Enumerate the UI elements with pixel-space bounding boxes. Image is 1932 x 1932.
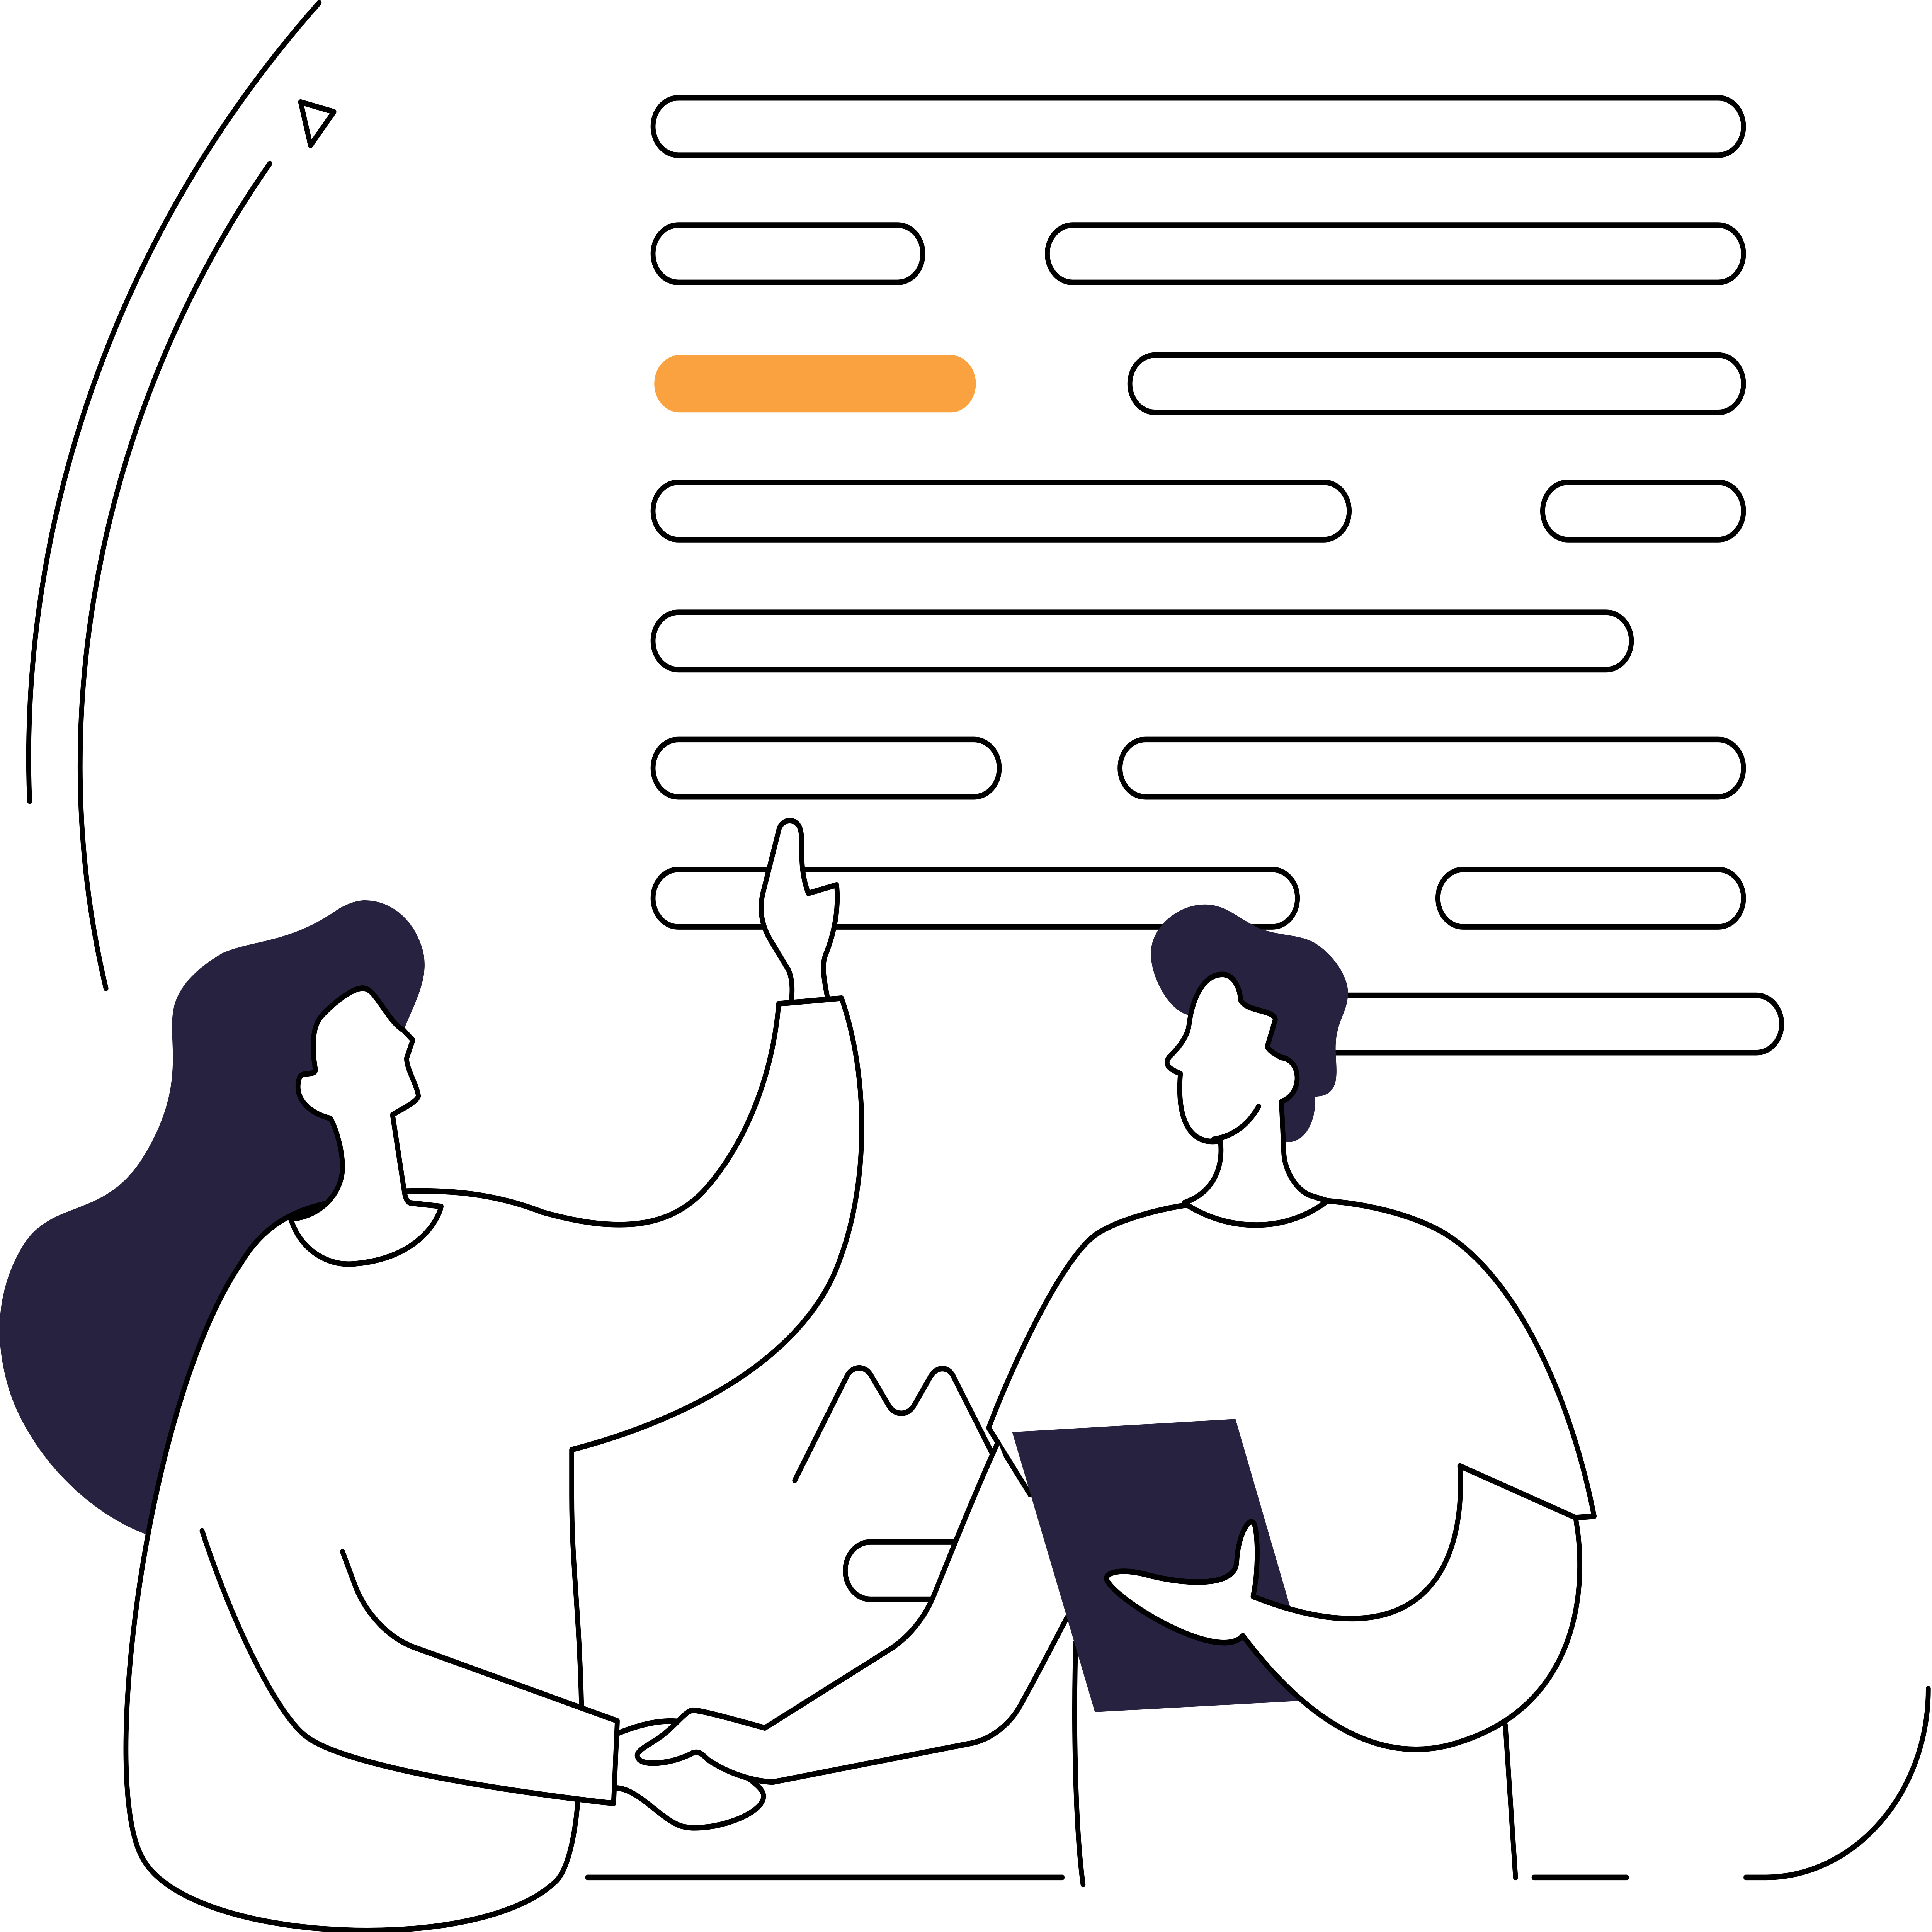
bar row 1	[653, 98, 1743, 155]
icon: triangle	[301, 102, 334, 145]
bar row 5	[653, 612, 1631, 670]
man figure	[637, 905, 1594, 1884]
man arm shaking hands	[637, 1442, 1067, 1782]
man left leg line	[1075, 1643, 1083, 1884]
outer decorative arc	[29, 3, 319, 801]
man right forearm and hand	[1106, 1466, 1580, 1749]
bar row 8	[1245, 995, 1782, 1053]
bar row 4 right	[1543, 482, 1743, 540]
clipboard	[1012, 1419, 1317, 1712]
woman hair	[0, 900, 425, 1535]
woman raised hand	[761, 821, 837, 1004]
inner decorative arc	[80, 163, 270, 988]
man torso	[988, 1199, 1593, 1878]
woman sleeve	[202, 1531, 617, 1803]
ground curve right	[1746, 1689, 1928, 1878]
woman chin shadow	[288, 1202, 328, 1220]
document text bars	[653, 98, 1782, 1599]
man face and neck	[1167, 975, 1328, 1225]
bar row 2 right	[1047, 225, 1743, 282]
bar row 6 right	[1120, 740, 1743, 797]
bar row 7 right	[1438, 869, 1743, 927]
man right leg line	[1505, 1725, 1515, 1878]
man hair	[1151, 905, 1348, 1142]
woman face and neck	[291, 988, 441, 1264]
bar row 3 right	[1130, 355, 1743, 412]
woman figure	[0, 821, 862, 1930]
bar row 7 left	[653, 869, 1298, 927]
woman hand in handshake	[617, 1721, 764, 1828]
ground line left	[588, 1877, 1062, 1878]
bar row 2 left	[653, 225, 923, 282]
mountain zigzag line	[795, 1368, 993, 1480]
man shoulder outline	[989, 1205, 1187, 1495]
man jaw line	[1214, 1106, 1259, 1139]
bar row 4 left	[653, 482, 1349, 540]
man sleeve outline	[1328, 1201, 1594, 1518]
woman torso	[126, 998, 862, 1930]
bar row 9	[845, 1542, 993, 1599]
ground line right	[1534, 1877, 1626, 1878]
highlighted orange bar	[654, 355, 976, 412]
bar row 6 left	[653, 740, 999, 797]
